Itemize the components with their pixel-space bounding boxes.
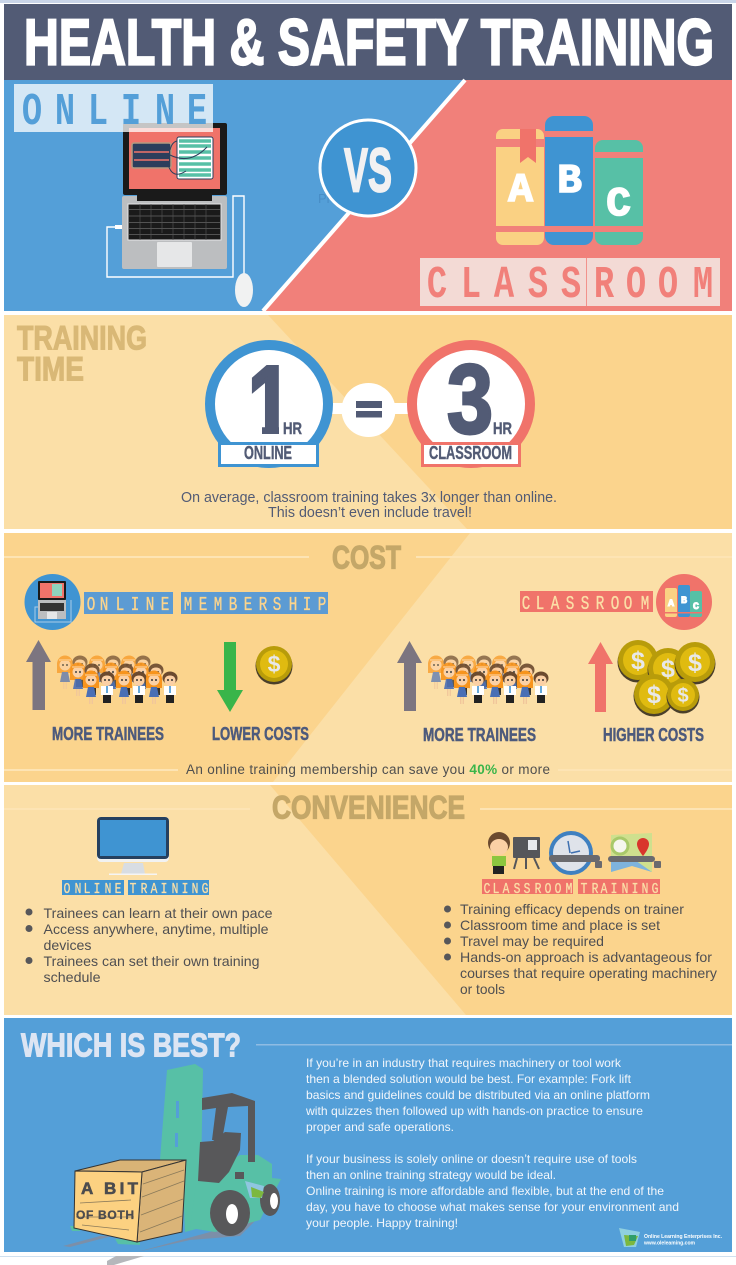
- icon: trainees group: [57, 656, 178, 704]
- classroom label: CLASSROOM: [427, 260, 713, 311]
- online 1 hr badge: ONLINE: [244, 443, 292, 463]
- heading: training time: TIME: [17, 350, 84, 388]
- classroom training bullets: Classroom time and place is set: [460, 917, 660, 933]
- label: lower costs: LOWER COSTS: [212, 724, 309, 744]
- text block: recommendation: If your business is solely online or doesn’t require use of tools: [306, 1152, 637, 1166]
- label: more trainees: MORE TRAINEES: [423, 725, 536, 745]
- icon: coin pile: $: [631, 647, 645, 675]
- icon: coin pile: $: [661, 655, 675, 683]
- icon: abc books: B: [557, 159, 582, 205]
- icon: coin pile: $: [677, 685, 689, 707]
- text block: recommendation: basics and guidelines could be distributed via an online platform: [306, 1088, 650, 1102]
- text block: recommendation: [305, 1056, 679, 1230]
- panel: convenience: [4, 785, 732, 1015]
- forklift fork shadow: [107, 1256, 144, 1265]
- icon: laptop and mouse: [107, 123, 253, 307]
- online training bullets: Access anywhere, anytime, multiple: [44, 921, 269, 937]
- classroom training bullets: Travel may be required: [460, 933, 604, 949]
- text block: recommendation: proper and safe operations.: [306, 1120, 454, 1134]
- bottom rule: [0, 1256, 736, 1257]
- classroom 3 hr badge: 3: [447, 344, 493, 454]
- top strip: [0, 0, 736, 3]
- classroom training bullets: Training efficacy depends on trainer: [460, 901, 684, 917]
- icon: coin pile: $: [688, 649, 702, 677]
- icon: monitor: [97, 817, 169, 875]
- icon: forklift with crate: [63, 1064, 281, 1252]
- icon: books circle: [656, 574, 712, 630]
- icon: coin pile: $: [647, 681, 661, 709]
- classroom training bullets: Hands-on approach is advantageous for: [460, 949, 712, 965]
- panel: online vs classroom hero: [4, 80, 732, 311]
- label: more trainees: MORE TRAINEES: [52, 724, 164, 744]
- text block: recommendation: If you’re in an industry that requires machinery or tool work: [306, 1056, 622, 1070]
- icon: abc books: C: [606, 182, 631, 228]
- classroom label: CLASSROOM: [522, 594, 649, 616]
- online 1 hr badge: 1: [248, 345, 292, 463]
- heading: which is best: WHICH IS BEST?: [21, 1028, 241, 1064]
- classroom 3 hr badge: HR: [493, 419, 512, 438]
- arrow: up, gray: [26, 640, 51, 710]
- online training bullets: [26, 905, 273, 985]
- panel: training time: [4, 315, 732, 529]
- online label: ONLINE: [22, 87, 207, 138]
- icon: trainees group: [428, 656, 548, 704]
- classroom 3 hr badge: CLASSROOM: [429, 443, 512, 463]
- icon: abc books: A: [508, 168, 533, 214]
- text block: recommendation: then a blended solution would be best. For example: Fork lift: [306, 1072, 632, 1086]
- online 1 hr badge: HR: [283, 419, 302, 438]
- logo: online learning enterprises: Online Learning Enterprises Inc.: [644, 1234, 722, 1240]
- icon: books circle: C: [693, 602, 699, 613]
- classroom training label: CLASSROOMTRAINING: [484, 881, 658, 898]
- online training bullets: Trainees can learn at their own pace: [44, 905, 273, 921]
- icon: forklift with crate: A BIT: [81, 1179, 139, 1198]
- text block: recommendation: then an online training strategy would be ideal.: [306, 1168, 556, 1182]
- icon: books circle: B: [681, 596, 687, 607]
- online 1 hr badge: [210, 345, 328, 466]
- online training label: ONLINETRAINING: [64, 881, 208, 898]
- caption: [181, 490, 557, 521]
- caption: This doesn’t even include travel!: [268, 505, 472, 521]
- panel: cost: [4, 533, 732, 782]
- icon: coin: [256, 646, 292, 684]
- classroom 3 hr badge: [412, 344, 530, 466]
- arrow: up, red: [588, 642, 613, 712]
- heading: training time: TRAINING: [17, 320, 147, 358]
- online training bullets: Trainees can set their own training: [44, 953, 260, 969]
- icon: trainer, clock and map: [488, 832, 661, 874]
- connector and equals: [322, 383, 415, 437]
- caption: On average, classroom training takes 3x longer than online.: [181, 490, 557, 506]
- icon: forklift with crate: OF BOTH: [76, 1208, 134, 1222]
- text block: recommendation: your people. Happy training!: [306, 1216, 458, 1230]
- classroom training bullets: [444, 901, 717, 997]
- label: higher costs: HIGHER COSTS: [603, 725, 704, 745]
- arrow: up, gray: [397, 641, 422, 711]
- faint text behind badge: Pl: [318, 191, 330, 206]
- text block: recommendation: with quizzes then followed up with hands-on practice to ensure: [305, 1104, 643, 1118]
- icon: online laptop circle: [24, 574, 80, 630]
- vs badge: [320, 120, 416, 216]
- logo: online learning enterprises: [619, 1228, 722, 1247]
- icon: books circle: A: [668, 599, 674, 610]
- heading: cost: COST: [332, 540, 401, 576]
- classroom training bullets: or tools: [460, 981, 505, 997]
- icon: coin: $: [268, 651, 281, 677]
- heading: training time: [17, 320, 147, 388]
- heading: convenience: CONVENIENCE: [272, 790, 465, 826]
- icon: coin pile: [618, 640, 716, 716]
- caption: An online training membership can save you 40% or more: [186, 762, 550, 777]
- icon: abc books: [496, 116, 644, 245]
- text block: recommendation: day, you have to choose what makes sense for your environment and: [306, 1200, 679, 1214]
- heading rule: [256, 1044, 732, 1046]
- online membership label: ONLINEMEMBERSHIP: [87, 595, 326, 617]
- classroom training bullets: courses that require operating machinery: [460, 965, 717, 981]
- online training bullets: schedule: [44, 969, 101, 985]
- text block: recommendation: Online training is more affordable and flexible, but at the end of the: [306, 1184, 664, 1198]
- online training bullets: devices: [44, 937, 92, 953]
- panel: which is best: [4, 1018, 732, 1252]
- logo: online learning enterprises: www.oleleaming.com: [643, 1240, 696, 1246]
- vs badge: VS: [344, 136, 392, 206]
- arrow: down, green: [217, 642, 243, 712]
